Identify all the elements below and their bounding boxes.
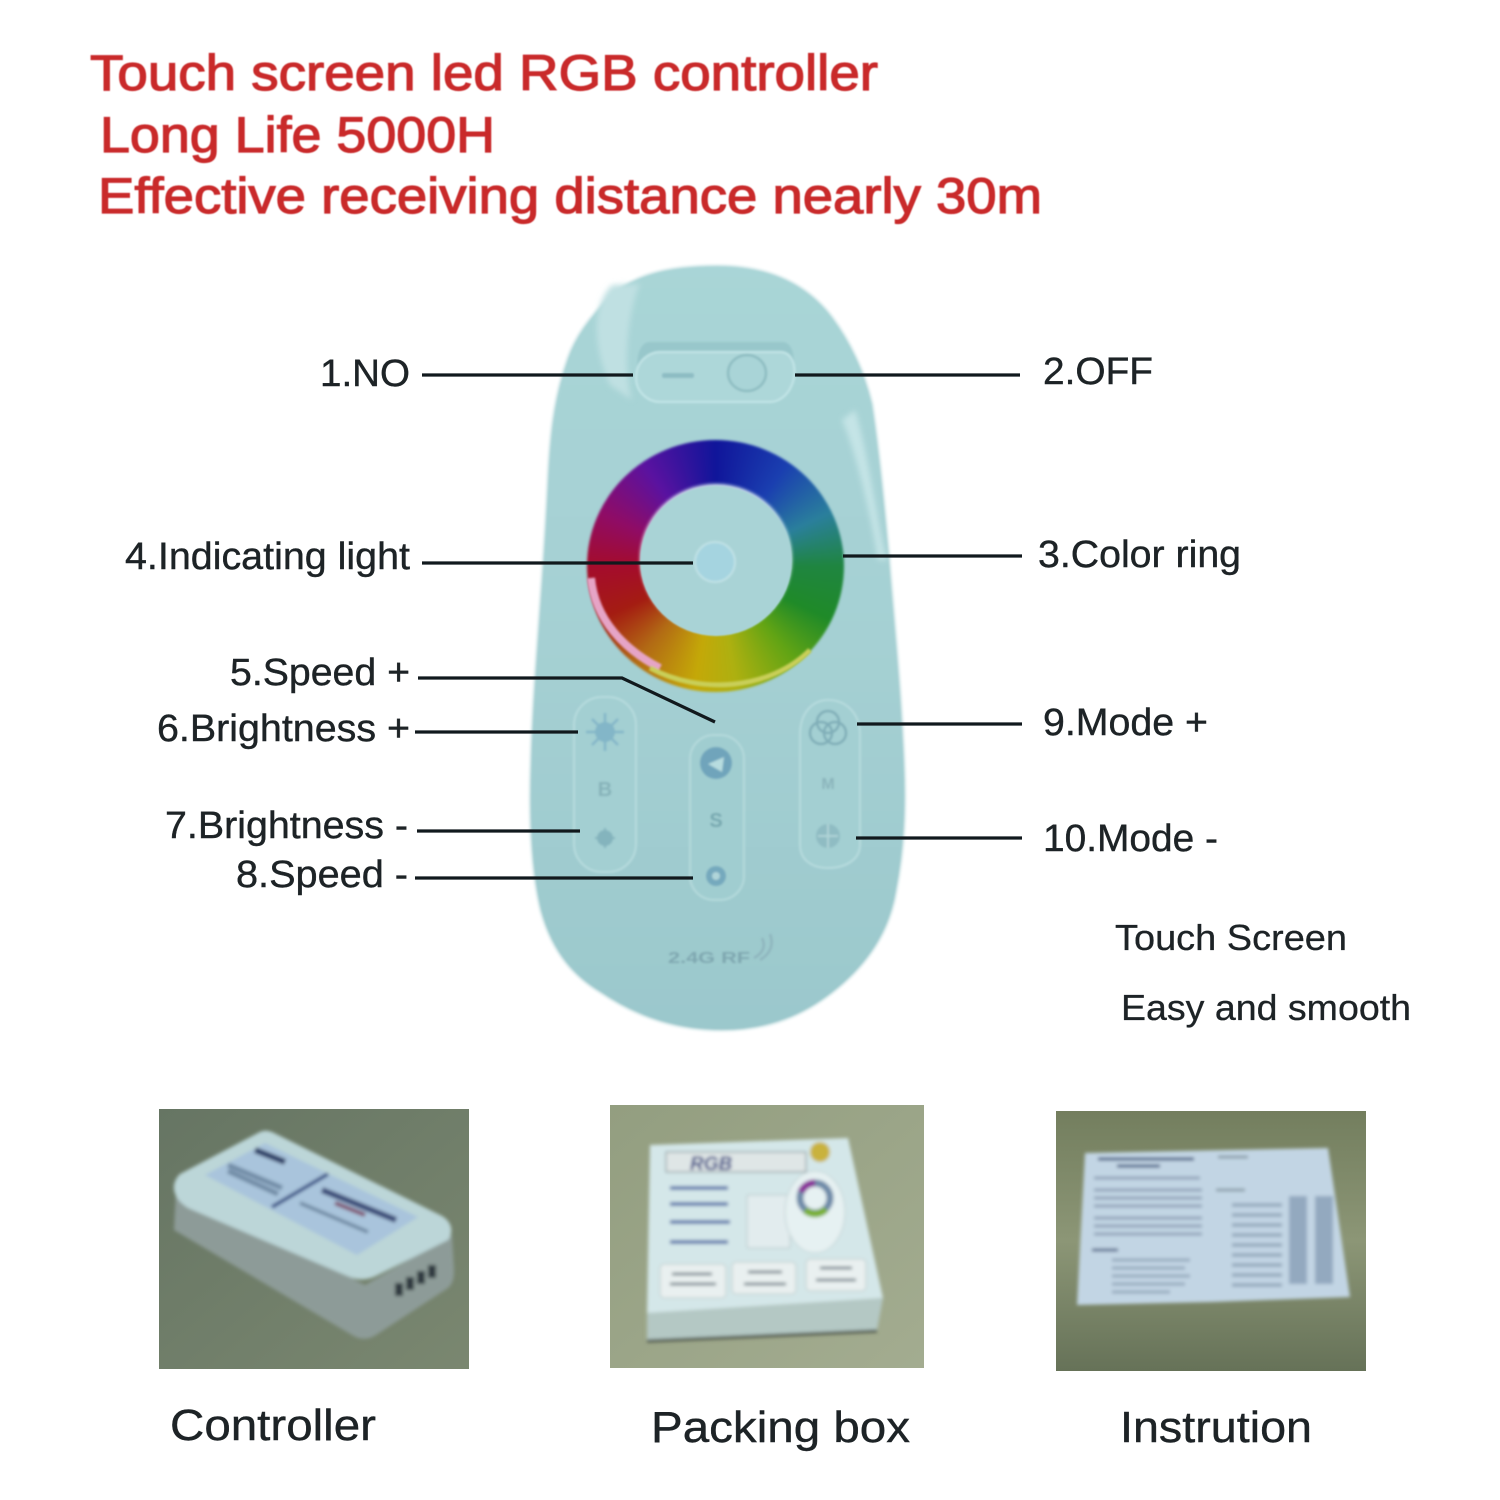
callout 7.Brightness -: 7.Brightness - <box>165 805 408 847</box>
text: touch screen note: Easy and smooth <box>1121 987 1411 1028</box>
ring centre touch disc <box>640 486 792 636</box>
callout 1.NO: 1.NO <box>320 353 410 395</box>
brightness button group <box>574 697 636 872</box>
title: Touch screen led RGB controller <box>90 45 878 101</box>
text: touch screen note: Touch Screen <box>1115 917 1347 958</box>
colour ring <box>587 440 844 692</box>
title: Long Life 5000H <box>100 107 495 163</box>
photo: controller <box>159 1109 469 1369</box>
indicating light <box>695 542 735 582</box>
photo: packing box <box>610 1105 924 1368</box>
callout 5.Speed + <box>230 652 715 722</box>
callout 2.OFF: 2.OFF <box>1043 351 1153 393</box>
photo: instruction sheet <box>1056 1111 1366 1371</box>
caption: instruction: Instrution <box>1120 1403 1312 1452</box>
photo: packing box: RGB <box>690 1154 732 1175</box>
mode button group: M <box>821 776 835 793</box>
callout 10.Mode -: 10.Mode - <box>1043 818 1218 860</box>
callout 3.Color ring: 3.Color ring <box>1038 534 1241 576</box>
brightness button group: B <box>598 779 612 801</box>
power button panel <box>636 342 794 402</box>
speed button group: S <box>709 810 723 832</box>
caption: controller: Controller <box>170 1401 376 1450</box>
title: Effective receiving distance nearly 30m <box>98 168 1042 224</box>
remote control body <box>529 265 906 1031</box>
callout 8.Speed -: 8.Speed - <box>236 854 408 896</box>
remote 2.4G RF mark: 2.4G RF <box>668 950 750 967</box>
mode button group <box>800 700 860 868</box>
callout 4.Indicating light: 4.Indicating light <box>125 536 410 578</box>
callout 9.Mode +: 9.Mode + <box>1043 702 1208 744</box>
callout 6.Brightness +: 6.Brightness + <box>157 708 410 750</box>
title <box>90 45 1042 224</box>
caption: packing box: Packing box <box>651 1403 910 1452</box>
speed button group <box>690 735 744 900</box>
remote 2.4G RF mark <box>668 934 772 967</box>
ring highlights <box>591 578 810 685</box>
callout 5.Speed +: 5.Speed + <box>230 652 410 694</box>
text: touch screen note <box>1115 917 1411 1028</box>
